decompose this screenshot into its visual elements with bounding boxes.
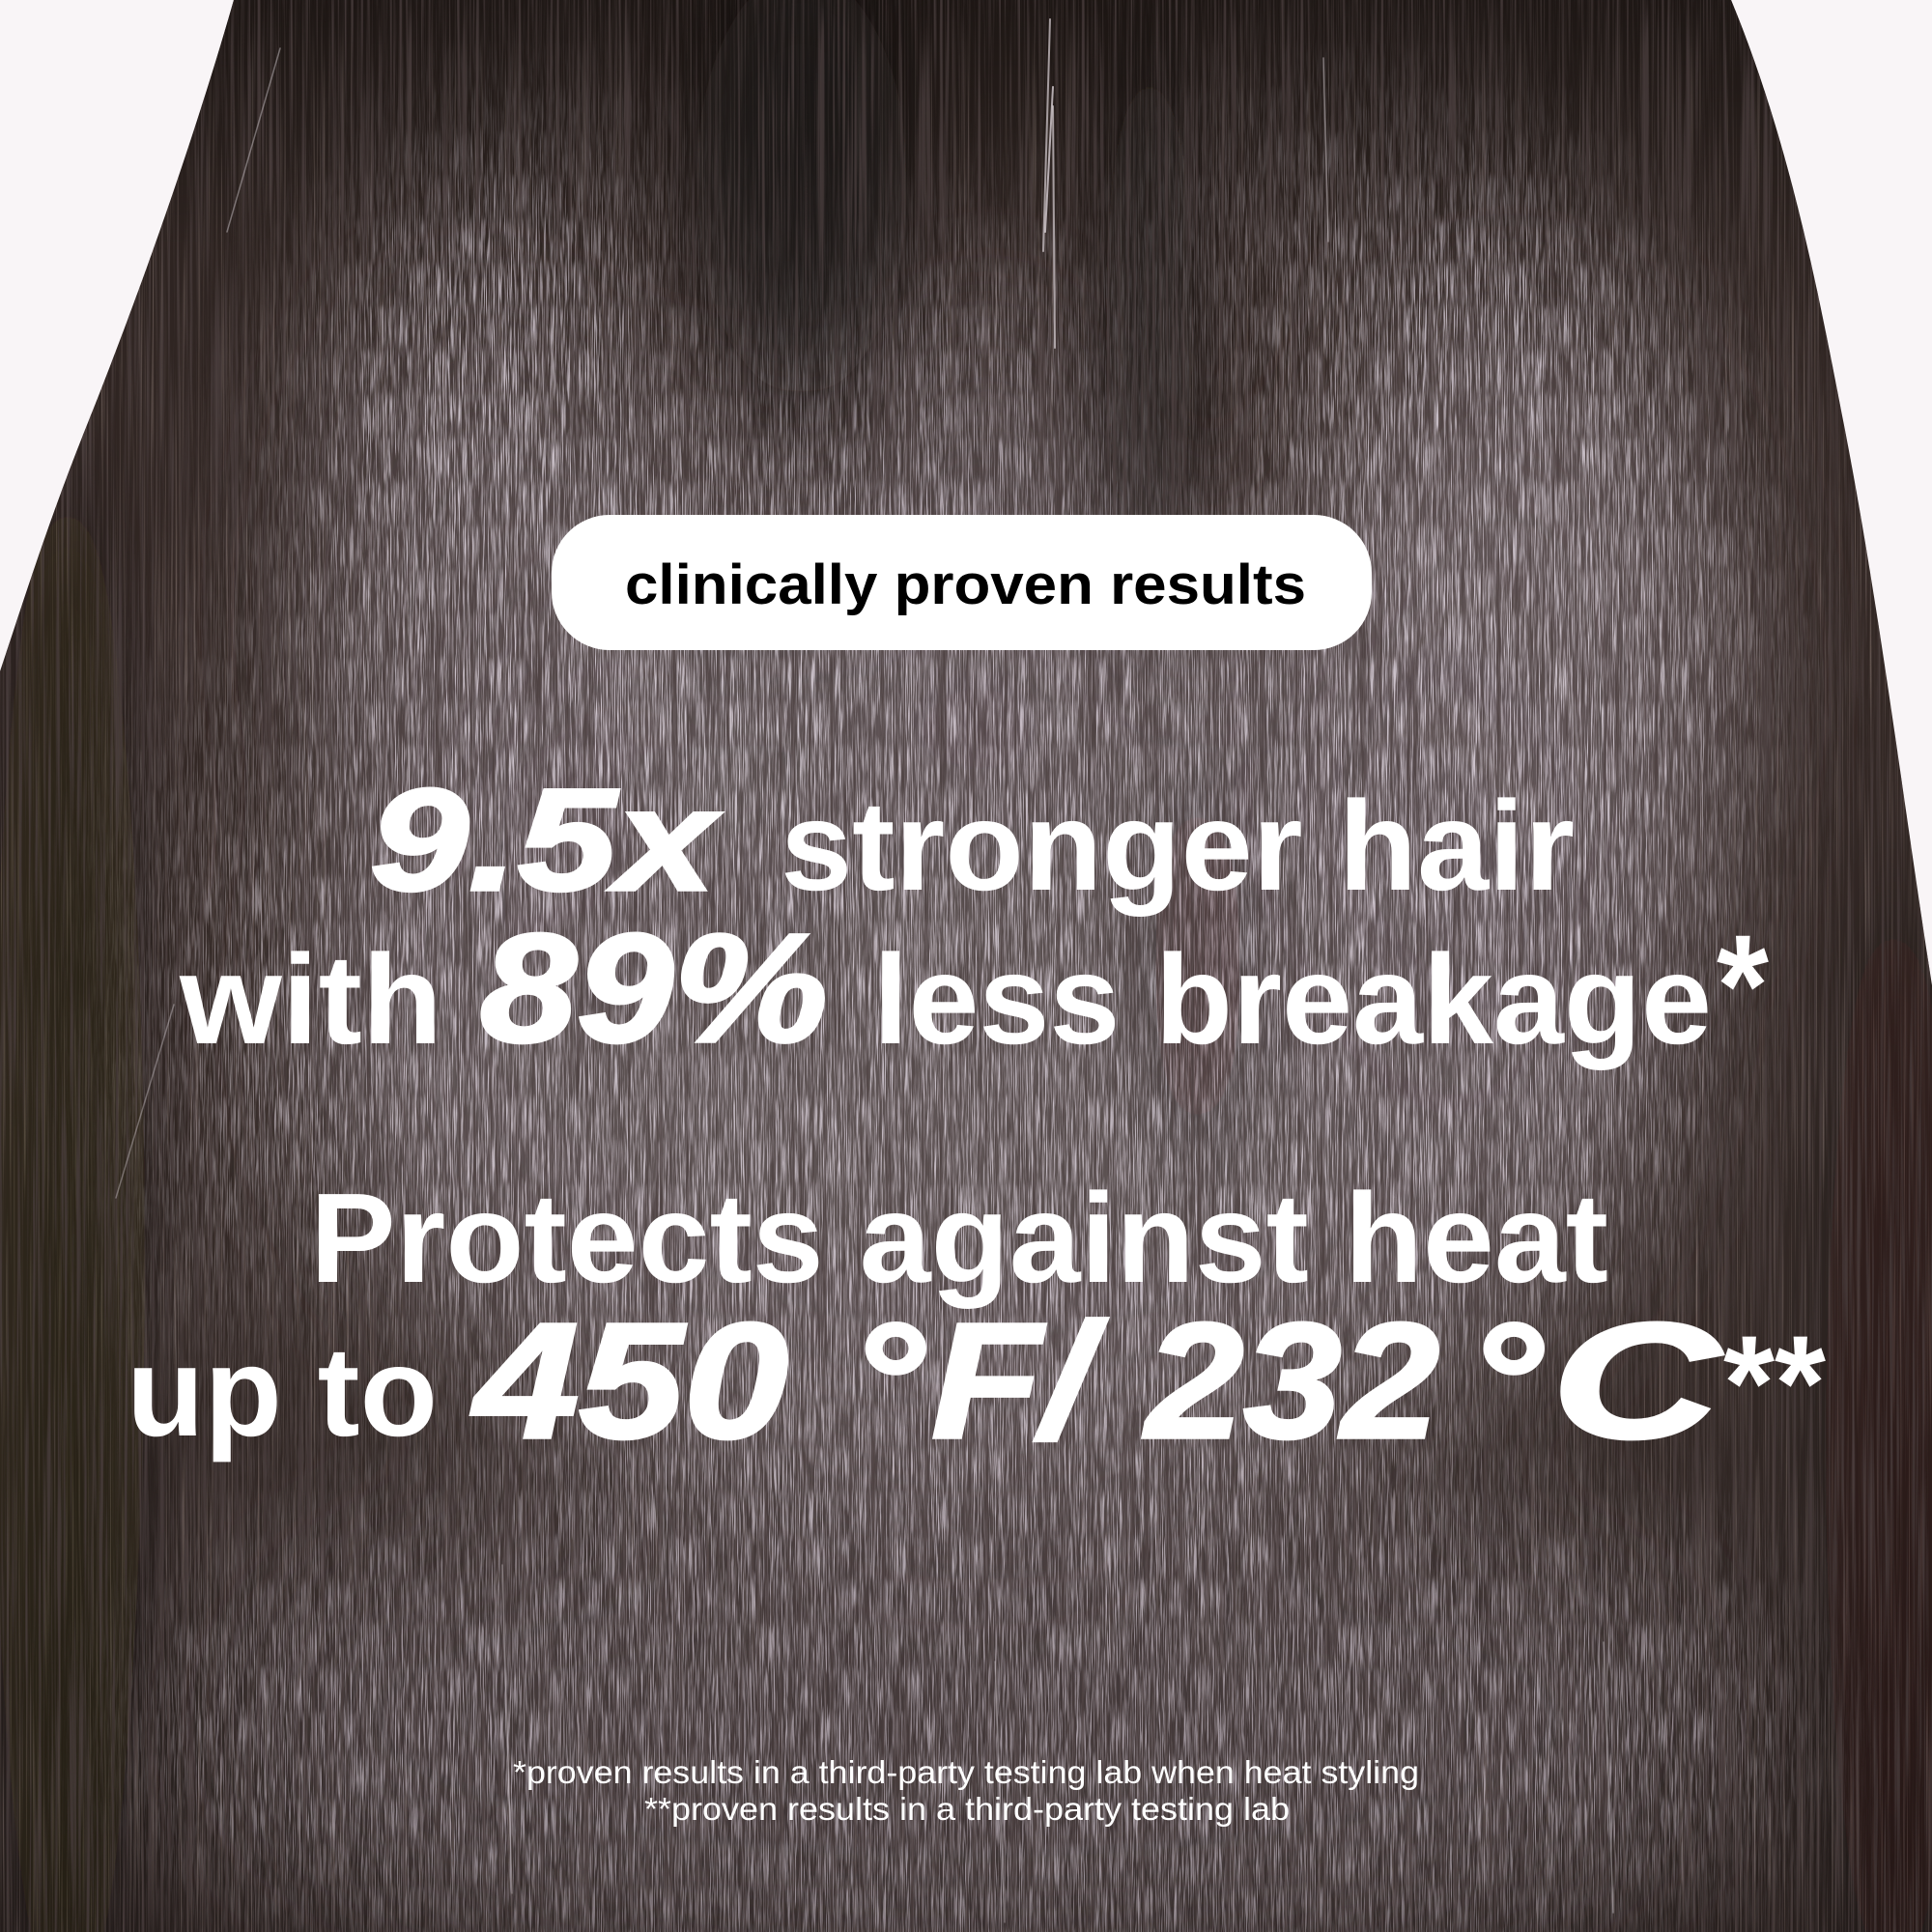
headline: heat protection claim: 450 <box>471 1290 788 1473</box>
headline: heat protection claim: F/ <box>931 1290 1108 1473</box>
headline: strength claim: with <box>179 928 442 1070</box>
footnotes <box>513 1754 1419 1827</box>
footnotes: **proven results in a third-party testing lab <box>644 1791 1290 1827</box>
headline: heat protection claim: ** <box>1723 1307 1826 1459</box>
headline: strength claim: stronger hair <box>781 775 1575 917</box>
headline: heat protection claim: ° <box>1468 1290 1543 1473</box>
headline: heat protection claim <box>127 1167 1826 1473</box>
headline: heat protection claim: ° <box>850 1290 924 1473</box>
headline: heat protection claim: C <box>1551 1290 1722 1473</box>
headline: strength claim: 89% <box>480 901 828 1074</box>
headline: strength claim <box>179 758 1770 1074</box>
headline: strength claim: 9.5x <box>370 758 722 921</box>
pill badge: clinically proven results <box>625 554 1306 616</box>
headline: heat protection claim: up to <box>127 1321 438 1463</box>
pill badge <box>552 515 1372 650</box>
headline: heat protection claim: Protects against heat <box>310 1167 1608 1309</box>
footnotes: *proven results in a third-party testing lab when heat styling <box>513 1754 1419 1790</box>
headline: heat protection claim: 232 <box>1143 1290 1439 1473</box>
headline: strength claim: * <box>1717 904 1770 1066</box>
headline: strength claim: less breakage <box>873 928 1712 1070</box>
